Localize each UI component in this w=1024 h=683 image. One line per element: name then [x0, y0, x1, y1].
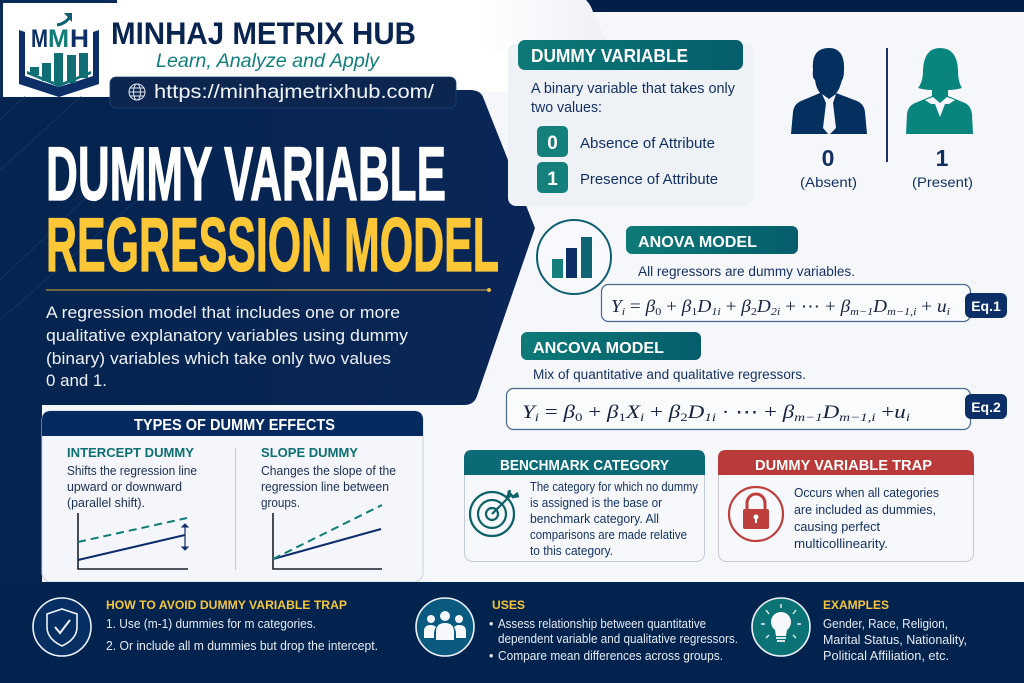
chart: intercept shift	[78, 513, 188, 569]
how to avoid text: 2. Or include all m dummies but drop the intercept.	[106, 639, 378, 653]
slope dummy text: SLOPE DUMMY	[261, 445, 358, 460]
dummy variable description: A binary variable that takes only	[531, 80, 735, 97]
equation 1: D	[696, 296, 712, 316]
equation 2: =	[539, 403, 564, 423]
intercept dummy text: INTERCEPT DUMMY	[67, 445, 194, 460]
trap text: causing perfect	[794, 519, 880, 534]
intercept dummy text: (parallel shift).	[67, 496, 145, 510]
value 0 row: 0	[547, 133, 558, 154]
equation 1: β	[841, 296, 849, 316]
uses text: dependent variable and qualitative regressors.	[498, 632, 738, 646]
panel: dummy variable trap	[718, 450, 974, 562]
website bar: https://minhajmetrixhub.com/	[154, 82, 435, 103]
intercept dummy text: upward or downward	[67, 480, 182, 494]
value 0 row: Absence of Attribute	[580, 136, 715, 152]
anova description: All regressors are dummy variables.	[638, 264, 855, 279]
dummy variable heading: DUMMY VARIABLE	[531, 46, 688, 66]
how to avoid text	[106, 598, 378, 653]
equation 2: β	[564, 403, 573, 423]
equation 2: Y	[522, 403, 532, 423]
slope dummy text	[261, 445, 396, 510]
logo panel: M	[48, 25, 69, 53]
dummy variable description	[531, 80, 735, 116]
equation 2: 0	[575, 410, 582, 424]
benchmark text: to this category.	[530, 544, 613, 558]
equation 1: + ⋯ +	[780, 296, 841, 316]
uses text: •	[489, 617, 493, 631]
brand name: MINHAJ METRIX HUB	[111, 15, 416, 51]
label: 1 present: 1	[936, 145, 949, 171]
equation 2	[506, 388, 970, 430]
intro paragraph	[46, 303, 409, 390]
equation 1: m−1	[850, 306, 873, 318]
equation 1: D	[756, 296, 771, 316]
ancova description: Mix of quantitative and qualitative regressors.	[533, 367, 806, 382]
uses text: •	[489, 649, 493, 663]
icon: bar chart	[537, 220, 611, 294]
icon: woman present	[906, 48, 973, 134]
top strip	[0, 0, 117, 97]
intro paragraph: 0 and 1.	[46, 371, 107, 390]
label: 1 present	[912, 145, 973, 190]
eq.1 badge: Eq.1	[971, 298, 1001, 314]
icon: light bulb	[752, 598, 810, 656]
equation 2: m−1,i	[839, 410, 876, 424]
equation 2: D	[686, 403, 705, 423]
equation 1	[602, 284, 970, 322]
equation 2: i	[906, 410, 910, 424]
benchmark heading: BENCHMARK CATEGORY	[500, 457, 669, 474]
equation 1: +	[661, 296, 682, 316]
icon: lock	[729, 487, 783, 541]
title line 2: REGRESSION MODEL	[46, 203, 499, 288]
slope dummy text: groups.	[261, 496, 300, 510]
intercept dummy text	[67, 445, 197, 510]
uses text: USES	[492, 598, 525, 612]
equation 2: i	[535, 410, 539, 424]
benchmark text: benchmark category. All	[530, 512, 659, 526]
intro paragraph: qualitative explanatory variables using dummy	[46, 326, 409, 345]
anova heading: ANOVA MODEL	[638, 234, 757, 251]
title rule	[46, 288, 491, 292]
intercept dummy text: Shifts the regression line	[67, 464, 197, 478]
tagline: Learn, Analyze and Apply	[156, 51, 381, 72]
intro paragraph: (binary) variables which take only two values	[46, 349, 391, 368]
equation 2: 2	[680, 410, 688, 424]
slope dummy text: Changes the slope of the	[261, 464, 396, 478]
equation 1: D	[872, 296, 887, 316]
equation 1: i	[947, 306, 950, 318]
equation 2: m−1	[794, 410, 823, 424]
equation 1: β	[682, 296, 690, 316]
label: 0 absent: (Absent)	[800, 174, 857, 190]
equation 2: · ⋯ +	[716, 403, 783, 423]
logo panel: M	[31, 25, 48, 53]
equation 1: +	[916, 296, 937, 316]
panel: benchmark category	[464, 450, 705, 562]
eq.1 badge	[965, 293, 1007, 318]
equation 2: i	[640, 410, 644, 424]
eq.2 badge: Eq.2	[971, 399, 1001, 415]
icon: people	[416, 598, 474, 656]
examples text: Political Affiliation, etc.	[823, 649, 949, 663]
equation 1: u	[937, 296, 946, 316]
benchmark text: The category for which no dummy	[530, 480, 699, 494]
eq.2 badge	[965, 394, 1007, 419]
equation 1: β	[741, 296, 750, 316]
anova heading	[626, 226, 798, 254]
icon: shield	[33, 598, 91, 656]
uses text	[489, 598, 738, 663]
equation 2: β	[669, 403, 678, 423]
panel: dummy variable	[508, 40, 753, 206]
label: 1 present: (Present)	[912, 174, 973, 190]
dummy variable description: two values:	[531, 99, 602, 116]
intro paragraph: A regression model that includes one or more	[46, 303, 400, 322]
panel: types of dummy effects	[42, 411, 423, 582]
label: 0 absent	[800, 145, 857, 190]
benchmark text	[530, 480, 699, 558]
equation 1: =	[625, 296, 646, 316]
equation 1: 1	[691, 306, 697, 318]
logo panel	[3, 3, 110, 97]
equation 2: X	[625, 403, 641, 423]
equation 2: 1	[618, 410, 626, 424]
icon: target	[470, 490, 519, 536]
examples text	[823, 598, 967, 663]
label: 0 absent: 0	[822, 145, 834, 171]
how to avoid text: HOW TO AVOID DUMMY VARIABLE TRAP	[106, 598, 347, 612]
trap text: are included as dummies,	[794, 502, 936, 517]
examples text: Marital Status, Nationality,	[823, 633, 967, 647]
value 1 row: Presence of Attribute	[580, 172, 718, 188]
ancova heading	[521, 332, 701, 360]
equation 1: 2	[751, 306, 757, 318]
benchmark text: comparisons are made relative	[530, 528, 687, 542]
equation 2: D	[821, 403, 840, 423]
equation 1: 2i	[771, 306, 780, 318]
examples text: Gender, Race, Religion,	[823, 617, 948, 631]
value 1 row: 1	[547, 169, 558, 190]
equation 2: +	[644, 403, 669, 423]
equation 2: β	[607, 403, 616, 423]
equation 1: +	[721, 296, 741, 316]
equation 2: +	[876, 403, 894, 423]
examples text: EXAMPLES	[823, 598, 889, 612]
navy hero background	[0, 90, 535, 582]
benchmark text: is assigned is the base or	[530, 496, 662, 510]
equation 2: u	[894, 403, 904, 423]
slope dummy text: regression line between	[261, 480, 389, 494]
uses text: Compare mean differences across groups.	[498, 649, 723, 663]
equation 1: 0	[655, 306, 662, 318]
uses text: Assess relationship between quantitative	[498, 617, 706, 631]
equation 1: β	[646, 296, 654, 316]
types heading: TYPES OF DUMMY EFFECTS	[134, 417, 335, 434]
chart: slope change	[273, 505, 382, 569]
equation 2: +	[582, 403, 607, 423]
equation 1: Y	[611, 296, 621, 316]
equation 2: β	[783, 403, 792, 423]
website bar	[110, 77, 456, 108]
trap text: multicollinearity.	[794, 536, 888, 551]
trap heading: DUMMY VARIABLE TRAP	[755, 457, 932, 474]
how to avoid text: 1. Use (m-1) dummies for m categories.	[106, 617, 316, 631]
equation 2: 1i	[704, 410, 716, 424]
equation 1: 1i	[711, 306, 721, 318]
icon: man absent	[791, 48, 867, 135]
divider	[886, 48, 888, 162]
ancova heading: ANCOVA MODEL	[533, 340, 664, 357]
trap text: Occurs when all categories	[794, 485, 939, 500]
footer band	[0, 582, 1024, 683]
trap text	[794, 485, 939, 551]
value 1 row	[537, 162, 718, 193]
title line 1: DUMMY VARIABLE	[46, 132, 446, 217]
value 0 row	[537, 126, 715, 157]
equation 1: m−1,i	[887, 306, 916, 318]
logo panel: H	[70, 25, 89, 53]
equation 1: i	[622, 306, 625, 318]
